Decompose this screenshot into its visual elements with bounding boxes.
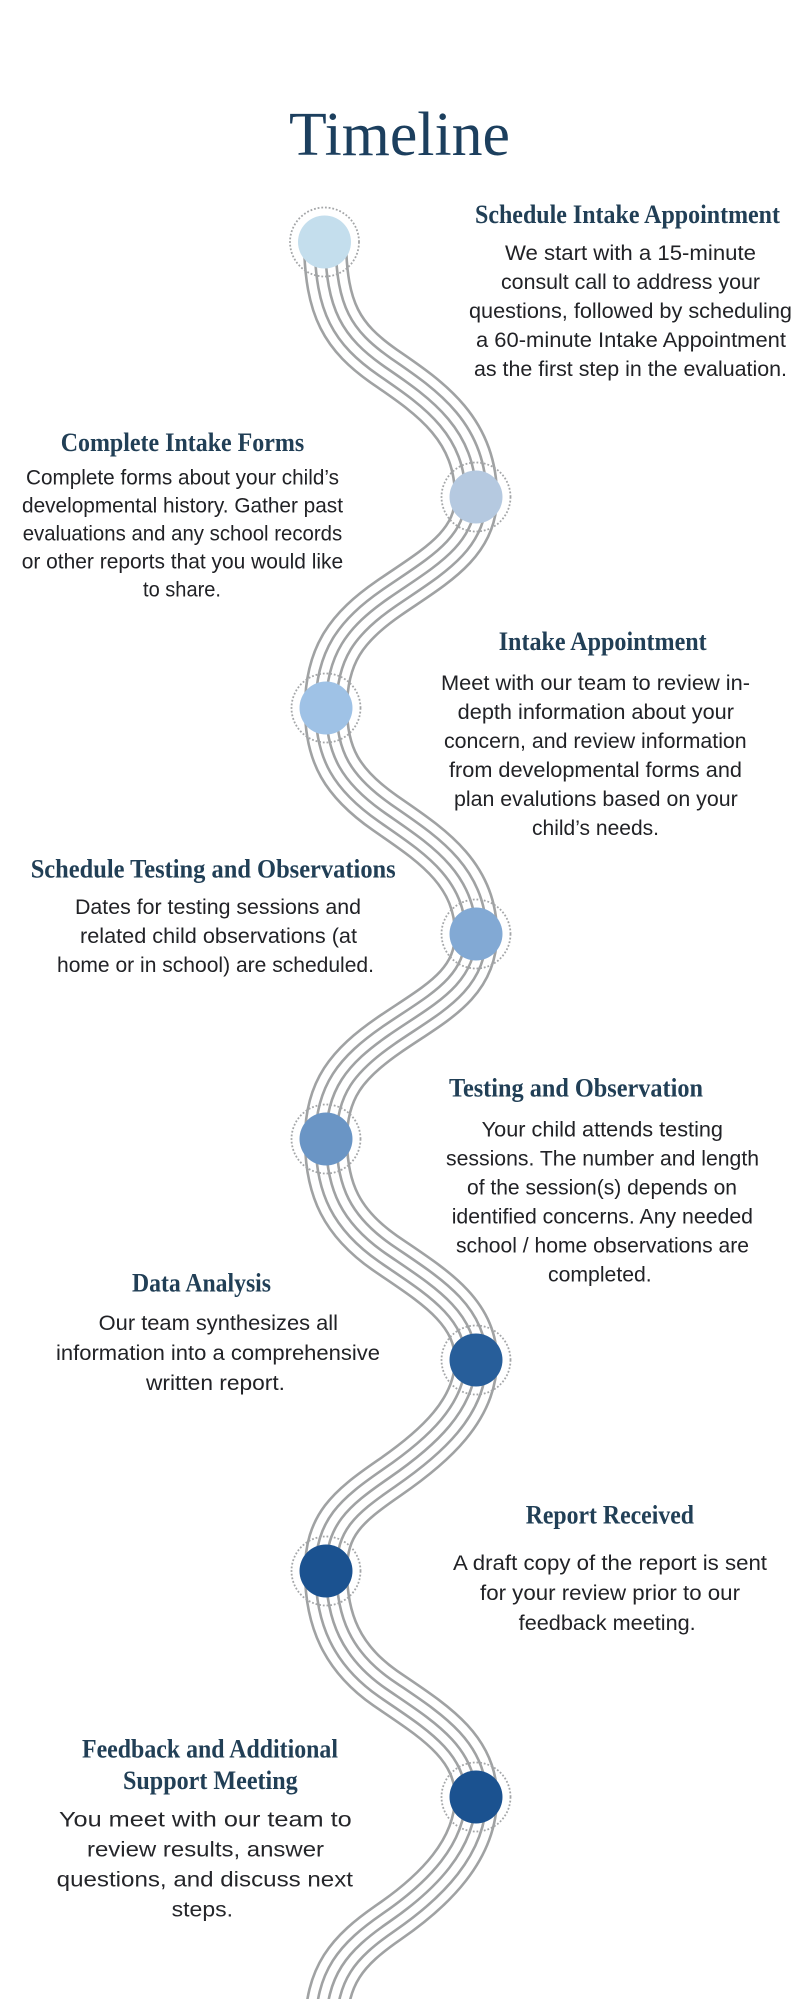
body text: of the session(s) depends on	[467, 1175, 737, 1199]
winding five-strand timeline path	[325, 242, 476, 1999]
body text: evaluations and any school records	[23, 521, 342, 545]
body text: written report.	[145, 1371, 285, 1395]
heading: Report Received	[526, 1501, 694, 1530]
body text: concern, and review information	[444, 729, 747, 753]
title: Timeline	[289, 101, 510, 169]
body text: from developmental forms and	[449, 758, 742, 782]
panel: Feedback and Additional Support Meeting	[57, 1735, 353, 1922]
body text: child’s needs.	[532, 816, 659, 840]
body text: We start with a 15-minute	[505, 241, 756, 265]
heading: Support Meeting	[123, 1766, 298, 1795]
body text: a 60-minute Intake Appointment	[476, 328, 786, 352]
body text: questions, followed by scheduling	[469, 299, 792, 323]
heading: Complete Intake Forms	[61, 428, 304, 457]
panel: Testing and Observation	[446, 1074, 759, 1286]
body text: or other reports that you would like	[22, 549, 343, 573]
body text	[441, 671, 750, 840]
body text: completed.	[548, 1262, 652, 1286]
marker: step 3	[292, 674, 360, 742]
body text: for your review prior to our	[480, 1581, 740, 1605]
marker: step 5	[292, 1104, 360, 1174]
heading: Feedback and Additional	[82, 1735, 338, 1764]
body text	[56, 1311, 380, 1395]
body text: as the first step in the evaluation.	[474, 357, 787, 381]
body text	[22, 465, 343, 601]
heading: Intake Appointment	[499, 627, 707, 656]
marker: step 4	[442, 900, 510, 968]
body text: review results, answer	[87, 1838, 324, 1862]
panel: Intake Appointment	[441, 627, 750, 840]
body text: related child observations (at	[80, 924, 357, 948]
panel: Complete Intake Forms	[22, 428, 343, 601]
panel: Schedule Intake Appointment	[469, 200, 792, 381]
body text: identified concerns. Any needed	[452, 1204, 753, 1228]
panel: Schedule Testing and Observations	[31, 855, 396, 977]
heading: Schedule Intake Appointment	[475, 200, 780, 229]
body text: steps.	[172, 1898, 233, 1922]
body text: school / home observations are	[456, 1233, 749, 1257]
body text: developmental history. Gather past	[22, 493, 343, 517]
body text	[446, 1117, 759, 1286]
heading: Schedule Testing and Observations	[31, 855, 396, 884]
body text	[57, 895, 374, 977]
heading: Data Analysis	[132, 1269, 271, 1298]
marker: step 7	[292, 1536, 360, 1606]
body text: plan evalutions based on your	[454, 787, 738, 811]
body text: Meet with our team to review in-	[441, 671, 750, 695]
heading	[82, 1735, 338, 1795]
body text	[453, 1551, 767, 1635]
body text: information into a comprehensive	[56, 1341, 380, 1365]
body text: Complete forms about your child’s	[26, 465, 339, 489]
marker: step 6	[442, 1326, 510, 1394]
panel: Report Received	[453, 1501, 767, 1635]
body text: to share.	[143, 577, 221, 601]
body text: sessions. The number and length	[446, 1146, 759, 1170]
body text: A draft copy of the report is sent	[453, 1551, 767, 1575]
body text: consult call to address your	[501, 270, 760, 294]
body text: feedback meeting.	[519, 1611, 696, 1635]
heading: Testing and Observation	[449, 1074, 703, 1103]
body text: You meet with our team to	[59, 1808, 352, 1832]
body text	[469, 241, 792, 381]
marker: step 1	[290, 208, 359, 276]
body text: questions, and discuss next	[57, 1868, 353, 1892]
body text	[57, 1808, 353, 1922]
body text: Our team synthesizes all	[99, 1311, 338, 1335]
marker: step 2	[442, 462, 510, 532]
body text: home or in school) are scheduled.	[57, 953, 374, 977]
marker: step 8	[442, 1762, 510, 1832]
body text: Your child attends testing	[482, 1117, 723, 1141]
body text: Dates for testing sessions and	[75, 895, 361, 919]
body text: depth information about your	[458, 700, 734, 724]
panel: Data Analysis	[56, 1269, 380, 1395]
